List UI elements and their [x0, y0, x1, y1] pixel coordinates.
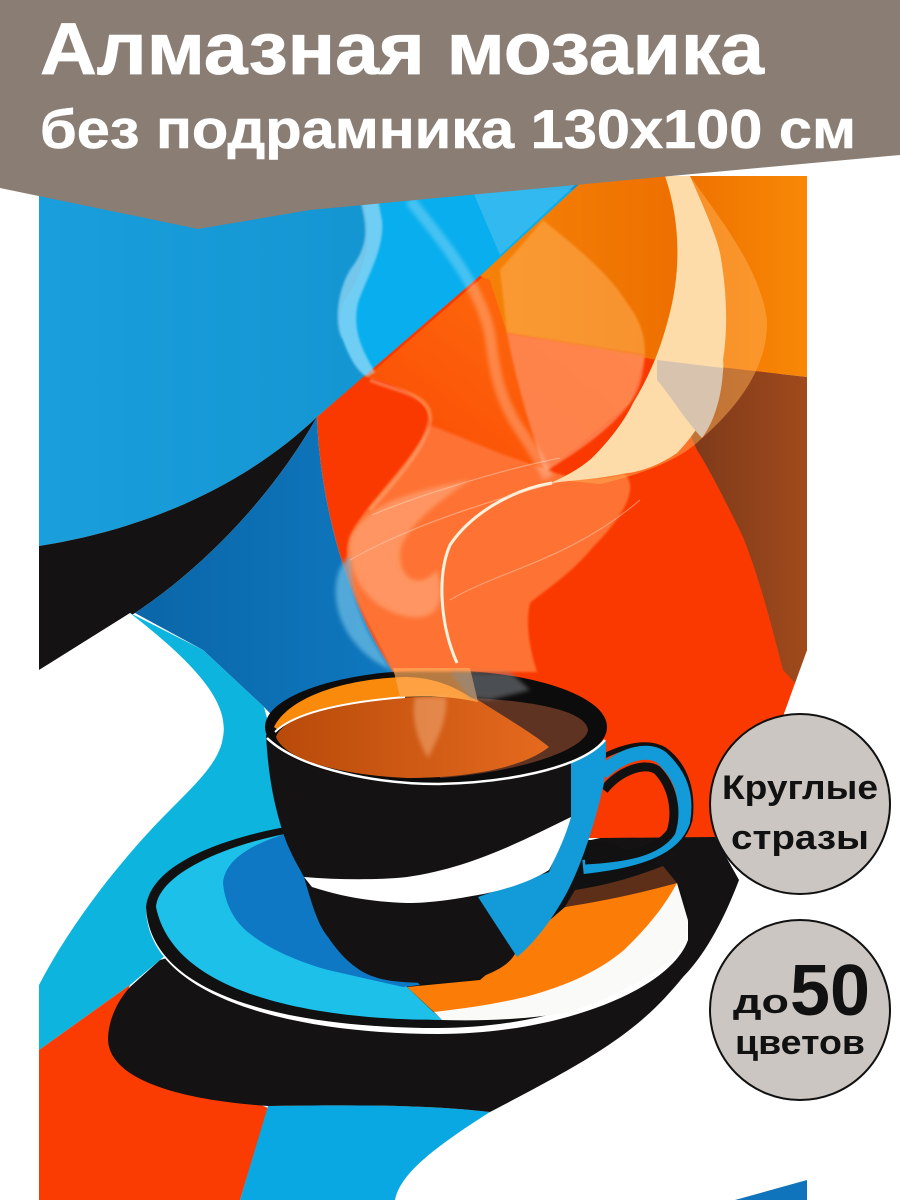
panel: orange top right [480, 176, 807, 377]
panel: blue sky area [39, 176, 600, 546]
handle outer outline [606, 742, 694, 838]
panel: dark blue centre [135, 417, 393, 745]
panel: black left curve [39, 417, 317, 670]
coffee rim white line [275, 697, 405, 732]
steam white trail [442, 483, 552, 663]
panel: red bottom left [39, 985, 268, 1200]
panel: red-orange centre [317, 265, 807, 838]
handle inner black [585, 767, 674, 860]
cup [265, 670, 691, 983]
steam salmon mid [507, 333, 645, 472]
steam inner pale lobe [349, 480, 470, 617]
steam outer ribbon glow [560, 176, 767, 484]
header banner [0, 0, 900, 229]
steam central wisp [410, 200, 548, 478]
title line 2: без подрамника 130х100 см [40, 98, 856, 160]
saucer outer white rim [146, 907, 688, 1034]
steam left blue haze [336, 556, 393, 672]
badge text line 2: стразы [731, 819, 869, 857]
steam lower plume [347, 425, 630, 672]
coffee rim crescent [274, 677, 478, 730]
panel: brown right band [691, 368, 807, 683]
cup white stripe [304, 817, 571, 903]
steam peach ribbon [550, 176, 726, 483]
badge text line 1: Круглые [722, 769, 878, 807]
coffee surface [276, 697, 549, 778]
steam blue wisp [338, 200, 382, 377]
steam [336, 176, 767, 758]
cup blue side [478, 740, 606, 957]
saucer white lower [434, 883, 688, 1020]
cup rim [265, 670, 607, 760]
cup body [266, 735, 575, 983]
badge: up to 50 colors [710, 920, 890, 1100]
panel: cyan swoosh [39, 613, 300, 1050]
saucer [146, 828, 688, 1034]
saucer blue well [223, 834, 420, 987]
panel: pale blue top patch [470, 185, 575, 255]
title line 1: Алмазная мозаика [40, 9, 766, 90]
saucer brown shadow [565, 866, 677, 907]
coffee dark part [430, 697, 588, 778]
steam over cup [393, 668, 478, 702]
badge: round rhinestones [710, 714, 890, 894]
cup rim white line [267, 738, 605, 784]
saucer black ring [146, 828, 688, 1028]
saucer orange [407, 883, 677, 1012]
steam smoke on rim [450, 672, 530, 700]
saucer cyan [156, 834, 442, 1020]
steam wisp join [370, 380, 430, 510]
steam thin lines [350, 458, 640, 600]
badge text до: до [733, 983, 789, 1021]
badge number 50: 50 [790, 951, 870, 1031]
panel: black shadow under saucer [108, 837, 739, 1130]
steam ribbon grey overlap [657, 360, 723, 438]
steam pale orange over top band [500, 220, 645, 355]
steam in coffee [414, 697, 446, 758]
badge text цветов: цветов [735, 1024, 865, 1062]
panel: blue corner bottom right [735, 1180, 807, 1200]
handle blue [583, 753, 684, 867]
painting: coffee cup artwork [39, 176, 807, 1200]
panel: light blue wedge [340, 190, 590, 377]
panel: orange band under diagonal [367, 262, 645, 472]
panel: blue bottom [240, 1105, 490, 1200]
panel: white swoosh left [39, 613, 224, 985]
banner shape [0, 0, 900, 229]
